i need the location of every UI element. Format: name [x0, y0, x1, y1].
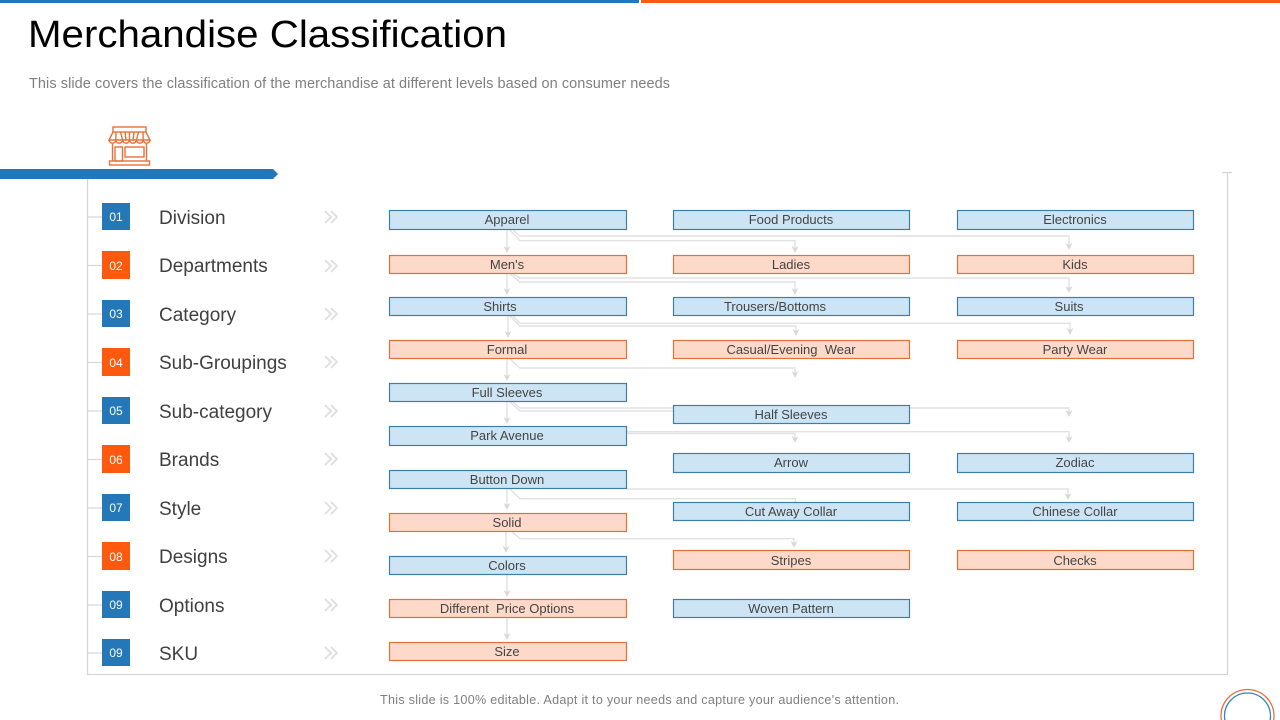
level 02 Departments	[102, 251, 337, 279]
level 06 Brands: Brands	[159, 450, 219, 471]
level 05 Sub-category: 05	[109, 404, 123, 418]
content frame	[88, 172, 1232, 674]
row: Division	[390, 210, 1194, 230]
title: Merchandise Classification	[28, 14, 507, 56]
row: Sub-Groupings: Casual/Evening Wear	[726, 342, 856, 357]
row: Brands	[390, 426, 1194, 472]
row: SKU: Size	[494, 644, 520, 659]
row: Division: Electronics	[1043, 212, 1107, 227]
row: Division: Apparel	[485, 212, 530, 227]
row: Designs	[390, 514, 1194, 570]
row: Designs: Stripes	[771, 553, 812, 568]
level 01 Division	[102, 203, 337, 230]
level 03 Category	[102, 300, 337, 327]
row: Options: Woven Pattern	[748, 601, 834, 616]
row: Category: Shirts	[483, 299, 517, 314]
row: Sub-category: Full Sleeves	[472, 385, 543, 400]
level 09 Options: Options	[159, 596, 224, 617]
connector arrows	[502, 230, 1074, 640]
level 01 Division: 01	[109, 210, 123, 224]
row: Brands: Zodiac	[1055, 455, 1095, 470]
row: Options: Colors	[488, 558, 526, 573]
level 09 SKU: 09	[109, 646, 123, 660]
level 07 Style: Style	[159, 499, 201, 520]
row: Sub-Groupings	[390, 340, 1194, 358]
level 08 Designs: 08	[109, 550, 123, 564]
level 09 SKU: SKU	[159, 644, 198, 665]
header ribbon arrow	[0, 169, 278, 179]
row: Brands: Arrow	[774, 455, 809, 470]
row: Division: Food Products	[749, 212, 834, 227]
row: Style: Chinese Collar	[1032, 504, 1118, 519]
level 02 Departments: 02	[109, 259, 123, 273]
footer note: This slide is 100% editable. Adapt it to your needs and capture your audience's attention.	[380, 693, 899, 707]
row: Sub-Groupings: Formal	[487, 342, 527, 357]
corner rings	[1221, 690, 1274, 720]
top accent bar	[0, 0, 1280, 3]
level 03 Category: Category	[159, 305, 237, 326]
level 02 Departments: Departments	[159, 256, 268, 277]
row: Style: Cut Away Collar	[745, 504, 838, 519]
icon: store	[109, 127, 150, 165]
level 09 Options	[102, 591, 337, 618]
row: Category: Suits	[1055, 299, 1084, 314]
row: Departments	[390, 256, 1194, 274]
row: Departments: Men's	[490, 257, 525, 272]
level 04 Sub-Groupings: 04	[109, 356, 123, 370]
row: Sub-category: Half Sleeves	[755, 407, 828, 422]
level 07 Style: 07	[109, 501, 123, 515]
row: Style	[390, 470, 1194, 520]
level 09 SKU	[102, 639, 337, 666]
row: Style: Button Down	[470, 472, 544, 487]
row: Departments: Ladies	[772, 257, 811, 272]
level 05 Sub-category: Sub-category	[159, 402, 273, 423]
level 01 Division: Division	[159, 208, 226, 229]
level 09 Options: 09	[109, 598, 123, 612]
level 07 Style	[102, 494, 337, 521]
row: Sub-Groupings: Party Wear	[1043, 342, 1108, 357]
level 08 Designs	[102, 542, 337, 570]
subtitle: This slide covers the classification of the merchandise at different levels based on consumer needs	[29, 76, 670, 92]
level list	[102, 203, 337, 666]
row: SKU	[390, 642, 626, 660]
classification grid	[390, 210, 1194, 660]
row: Brands: Park Avenue	[470, 428, 544, 443]
level 04 Sub-Groupings	[102, 348, 337, 376]
level 03 Category: 03	[109, 307, 123, 321]
row: Departments: Kids	[1062, 257, 1088, 272]
row: Options	[390, 556, 910, 618]
row: Options: Different Price Options	[440, 601, 575, 616]
level 05 Sub-category	[102, 397, 337, 424]
level 08 Designs: Designs	[159, 547, 228, 568]
level 06 Brands: 06	[109, 453, 123, 467]
level 06 Brands	[102, 445, 337, 473]
row: Designs: Solid	[493, 515, 521, 530]
row: Category	[390, 298, 1194, 316]
row: Category: Trousers/Bottoms	[724, 299, 827, 314]
level 04 Sub-Groupings: Sub-Groupings	[159, 353, 287, 374]
row: Sub-category	[390, 384, 910, 424]
row: Designs: Checks	[1053, 553, 1097, 568]
